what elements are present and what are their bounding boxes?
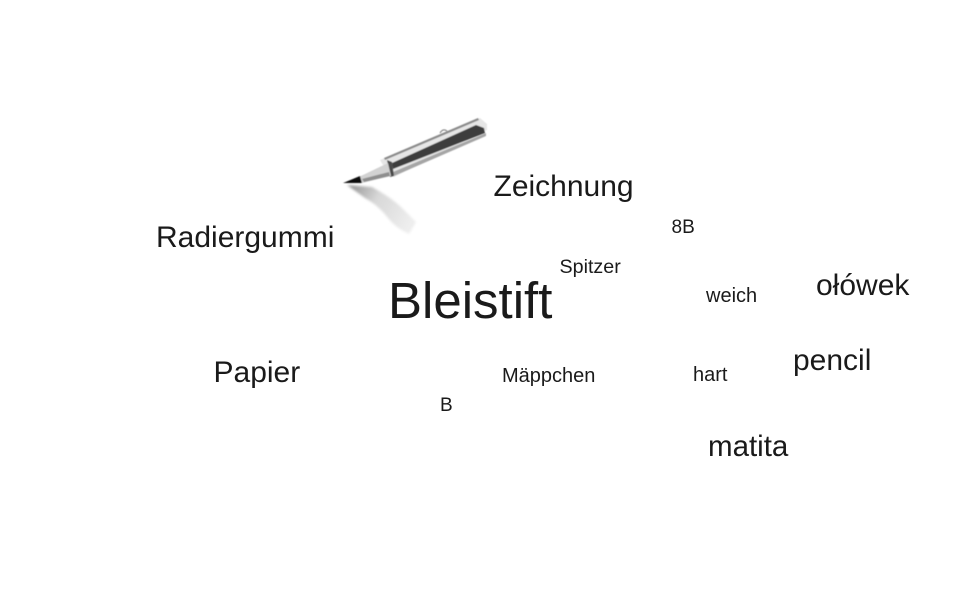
- word: Zeichnung: Zeichnung: [494, 170, 634, 203]
- word: ołówek: ołówek: [816, 269, 910, 302]
- word: B: B: [440, 395, 453, 416]
- word: 8B: 8B: [672, 217, 695, 238]
- word: weich: weich: [705, 285, 757, 307]
- pencil tip: [343, 163, 391, 183]
- word: Bleistift: Bleistift: [388, 272, 552, 329]
- icon: pencil sketch: [343, 118, 487, 234]
- word: matita: matita: [708, 430, 789, 463]
- word: hart: hart: [693, 364, 728, 386]
- word: pencil: pencil: [793, 344, 871, 377]
- pencil shadow: [347, 185, 416, 234]
- word: Radiergummi: Radiergummi: [156, 221, 334, 254]
- word: Papier: Papier: [214, 356, 300, 389]
- word: Spitzer: Spitzer: [560, 256, 621, 278]
- word: Mäppchen: Mäppchen: [502, 365, 595, 387]
- pencil body: [380, 118, 487, 177]
